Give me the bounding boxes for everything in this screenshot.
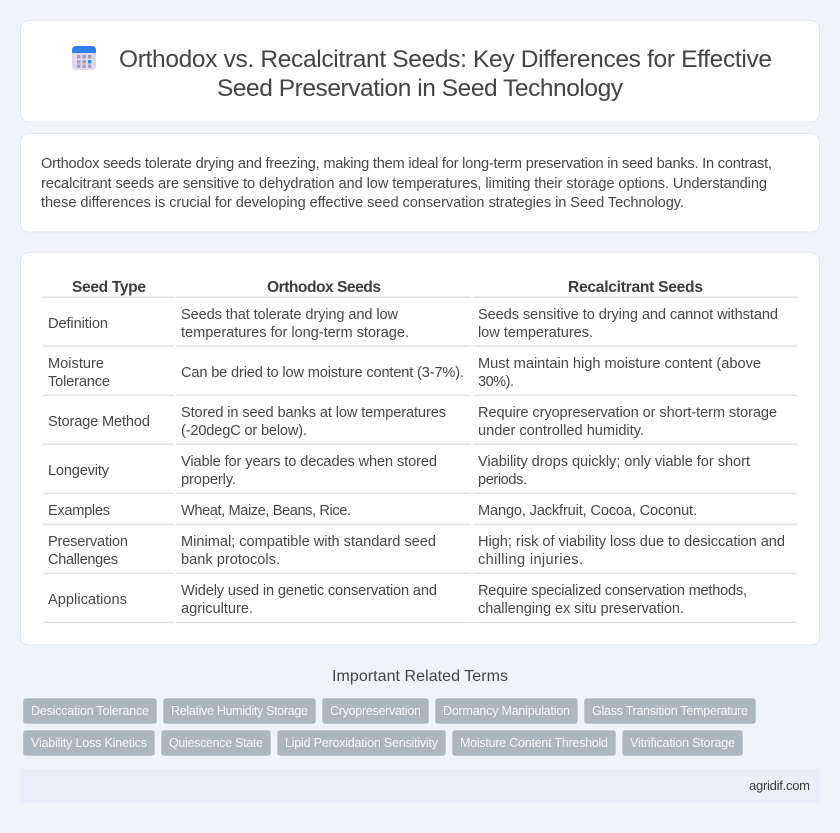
tag: dormancy manipulation: Dormancy Manipulation [443, 704, 570, 718]
table row: applications: Widely used in genetic conservation and [181, 583, 437, 599]
tag: lipid peroxidation sensitivity [278, 730, 446, 756]
table row: preservation challenges: bank protocols. [181, 552, 280, 568]
title [119, 46, 772, 102]
table row: longevity: Viable for years to decades when stored [181, 454, 437, 470]
table row: longevity: properly. [181, 472, 236, 488]
title: Seed Preservation in Seed Technology [217, 75, 624, 102]
table row: applications: Require specialized conservation methods, [478, 583, 747, 599]
table row: moisture tolerance [48, 356, 761, 390]
tag: quiescence state [162, 730, 270, 756]
table row: examples [48, 503, 697, 519]
heading: important related terms: Important Related Terms [332, 668, 508, 685]
tag: quiescence state: Quiescence State [169, 736, 263, 750]
table row: storage method [48, 405, 777, 439]
tag: desiccation tolerance: Desiccation Tolerance [31, 704, 149, 718]
table header: Recalcitrant Seeds [568, 279, 703, 296]
table row: moisture tolerance: 30%). [478, 374, 514, 390]
table row: moisture tolerance: Can be dried to low moisture content (3-7%). [181, 365, 464, 381]
table row: storage method: (-20degC or below). [181, 423, 307, 439]
text block: intro paragraph: Orthodox seeds tolerate drying and freezing, making them ideal for long-term preservation in seed banks. In contrast, [41, 156, 772, 172]
tag: cryopreservation: Cryopreservation [330, 704, 421, 718]
table row: longevity: Viability drops quickly; only viable for short [478, 454, 750, 470]
table row: longevity [48, 454, 750, 488]
tag: glass transition temperature [584, 698, 756, 724]
table row: applications [48, 583, 747, 617]
tag: vitrification storage: Vitrification Storage [630, 736, 735, 750]
table row: examples: Mango, Jackfruit, Cocoa, Coconut. [478, 503, 697, 519]
table row: examples: Wheat, Maize, Beans, Rice. [181, 503, 351, 519]
tag: viability loss kinetics: Viability Loss Kinetics [31, 736, 147, 750]
text block: intro paragraph: these differences is crucial for developing effective seed conservation strategies in Seed Technology. [41, 195, 684, 211]
table row: preservation challenges: Preservation [48, 534, 128, 550]
panel: title header [20, 20, 820, 122]
tag: vitrification storage [622, 730, 742, 756]
related term tags [24, 698, 756, 756]
table row: examples: Examples [48, 503, 110, 519]
table header [72, 279, 703, 296]
tag: dormancy manipulation [436, 698, 578, 724]
table row: applications: challenging ex situ preservation. [478, 601, 684, 617]
table row: preservation challenges: High; risk of viability loss due to desiccation and [478, 534, 785, 550]
table row: storage method: Require cryopreservation or short-term storage [478, 405, 777, 421]
table row: definition: low temperatures. [478, 325, 593, 341]
tag: viability loss kinetics [24, 730, 154, 756]
text block: intro paragraph [41, 156, 772, 211]
table row: definition: temperatures for long-term storage. [181, 325, 409, 341]
tag: cryopreservation [322, 698, 428, 724]
table row: definition [48, 307, 778, 341]
table row: longevity: Longevity [48, 463, 110, 479]
table header: Orthodox Seeds [267, 279, 381, 296]
table row: preservation challenges: chilling injuries. [478, 552, 583, 568]
tag: relative humidity storage: Relative Humidity Storage [171, 704, 308, 718]
tag: lipid peroxidation sensitivity: Lipid Peroxidation Sensitivity [285, 736, 439, 750]
tag: moisture content threshold: Moisture Content Threshold [460, 736, 608, 750]
table row: definition: Seeds that tolerate drying and low [181, 307, 398, 323]
table row: moisture tolerance: Moisture [48, 356, 104, 372]
table row: applications: agriculture. [181, 601, 253, 617]
footer site name: agridif.com [749, 778, 810, 793]
panel: introduction [20, 134, 820, 232]
table row: preservation challenges: Challenges [48, 552, 118, 568]
title: Orthodox vs. Recalcitrant Seeds: Key Differences for Effective [119, 46, 772, 73]
text block: intro paragraph: recalcitrant seeds are sensitive to dehydration and low temperatures, limiting their storage options. Understanding [41, 176, 767, 192]
panel: comparison table [20, 252, 820, 645]
table row: moisture tolerance: Must maintain high moisture content (above [478, 356, 761, 372]
table row: definition: Definition [48, 316, 108, 332]
footer bar [20, 769, 820, 803]
table row: storage method: Storage Method [48, 414, 150, 430]
table row: applications: Applications [48, 592, 127, 608]
tag: moisture content threshold [452, 730, 616, 756]
table row: preservation challenges: Minimal; compatible with standard seed [181, 534, 436, 550]
table row: longevity: periods. [478, 472, 527, 488]
tag: relative humidity storage [164, 698, 316, 724]
table row: storage method: Stored in seed banks at low temperatures [181, 405, 446, 421]
icon: calendar [72, 46, 96, 70]
table row: definition: Seeds sensitive to drying and cannot withstand [478, 307, 778, 323]
table row: preservation challenges [48, 534, 785, 568]
tag: desiccation tolerance [24, 698, 156, 724]
table header: Seed Type [72, 279, 146, 296]
tag: glass transition temperature: Glass Transition Temperature [592, 704, 748, 718]
table row: storage method: under controlled humidity. [478, 423, 644, 439]
table row: moisture tolerance: Tolerance [48, 374, 110, 390]
